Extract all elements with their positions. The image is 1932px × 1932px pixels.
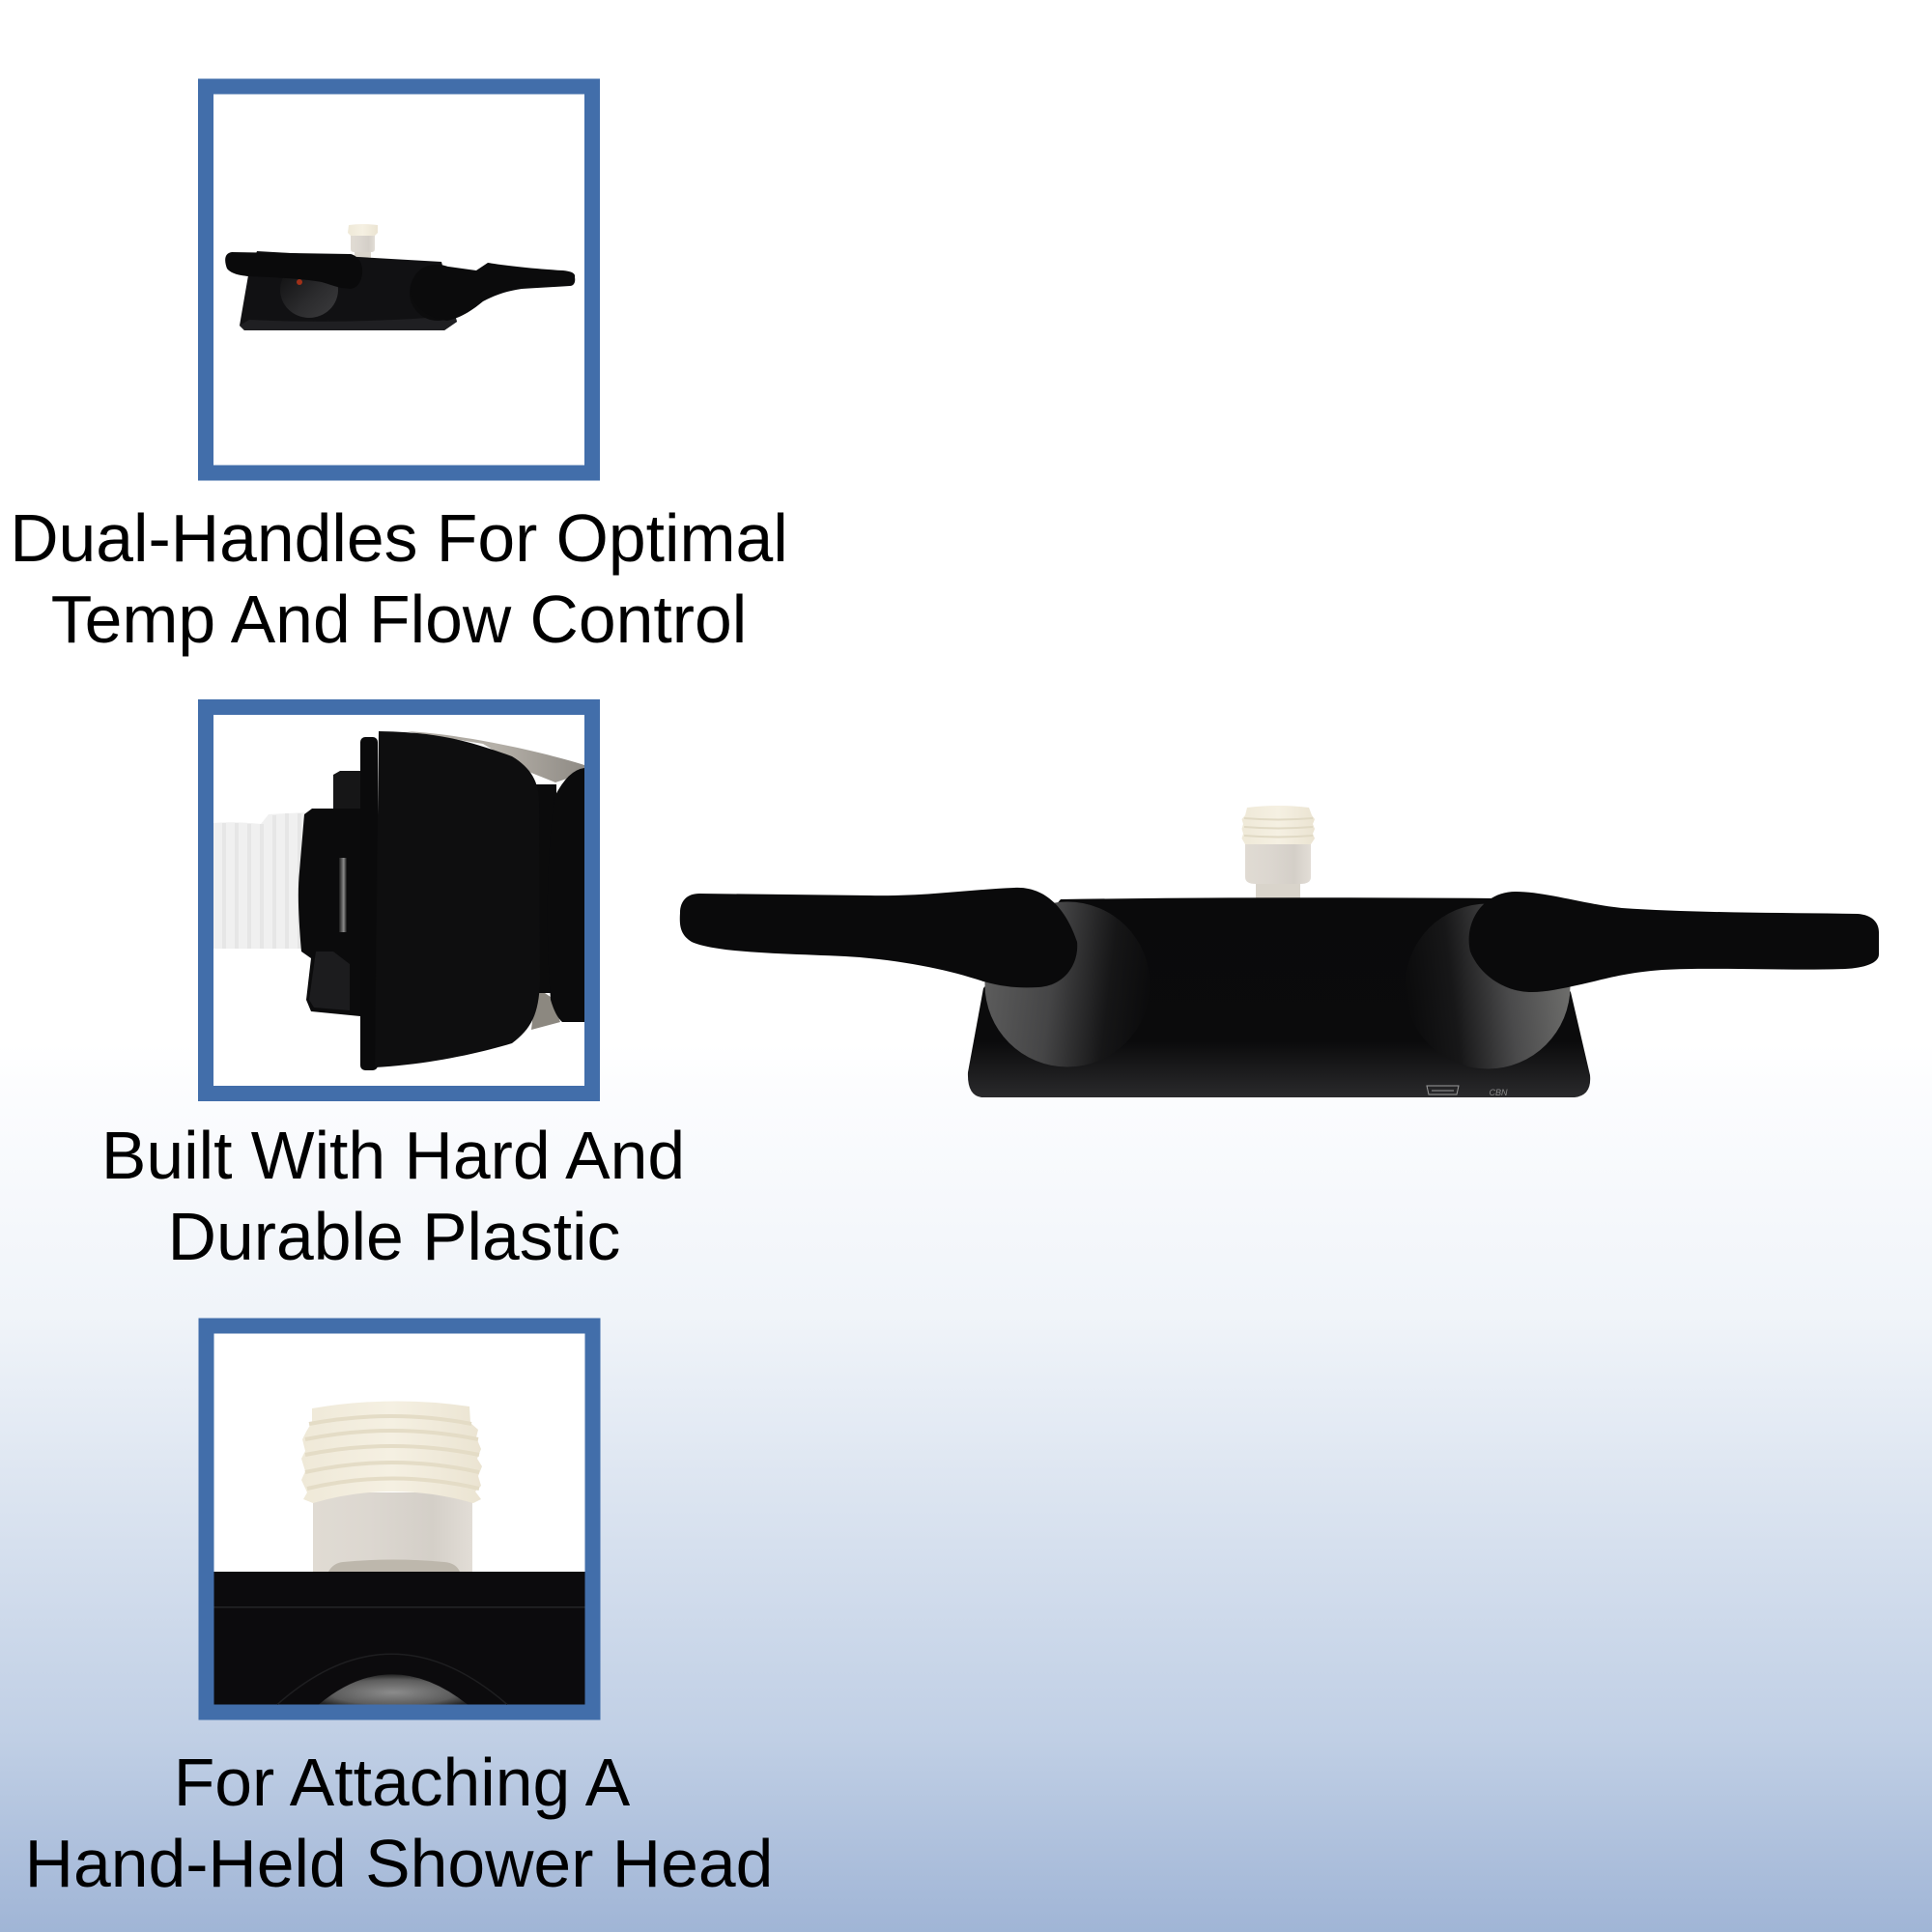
frame — [207, 1325, 593, 1712]
certification marks: CBN — [1489, 1088, 1508, 1097]
mini faucet — [225, 224, 575, 330]
right cone — [1405, 904, 1571, 1068]
frame — [206, 707, 592, 1094]
flange — [360, 737, 378, 1070]
caption line 2: hand-held: Hand-Held Shower Head — [25, 1826, 773, 1901]
dark gap between block and cone — [533, 784, 556, 993]
metallic body behind — [406, 731, 584, 782]
panel: durable plastic — [206, 707, 592, 1094]
seam line — [214, 1606, 585, 1607]
main body block — [375, 731, 540, 1067]
knurled nut — [298, 771, 362, 1016]
lower metallic sliver — [531, 987, 560, 1030]
hose thread — [213, 812, 309, 949]
certification marks — [1427, 1086, 1508, 1097]
left handle — [680, 888, 1077, 987]
panel: shower head connector — [207, 1325, 593, 1712]
caption: shower head connector: For Attaching A — [174, 1745, 631, 1820]
caption: dual handles: Dual-Handles For Optimal — [10, 500, 788, 576]
black faucet body — [214, 1572, 585, 1704]
spout connector — [1242, 806, 1315, 900]
caption line 2: temp and flow: Temp And Flow Control — [51, 582, 747, 657]
threaded connector — [301, 1401, 482, 1572]
caption: durable plastic: Built With Hard And — [101, 1118, 685, 1193]
arc — [277, 1654, 507, 1704]
dome — [319, 1674, 468, 1704]
frame — [206, 87, 592, 473]
right handle — [1469, 892, 1879, 992]
panel: dual handles — [206, 87, 592, 473]
cone at right — [548, 768, 584, 1022]
main product photo: shower faucet — [680, 806, 1879, 1097]
faucet base plate — [968, 897, 1590, 1097]
caption line 2: durable plastic: Durable Plastic — [168, 1199, 620, 1274]
left cone — [985, 902, 1150, 1066]
